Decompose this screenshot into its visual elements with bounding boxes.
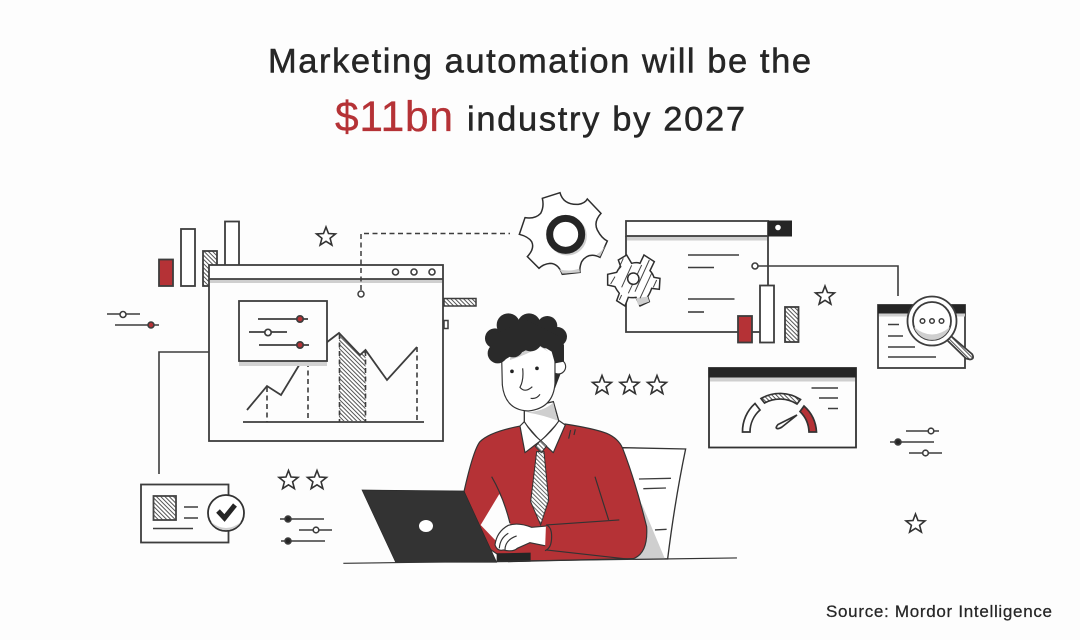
dashed connector to gear [358,234,510,297]
bar chart: top right [738,286,798,342]
hair [485,313,567,363]
icon: small gear [608,255,660,306]
hair back [553,350,564,388]
gauge [742,393,816,432]
panel: search window [878,296,973,368]
sweater [464,424,647,562]
line chart [243,333,424,422]
connector: window to check card [159,352,209,474]
icon: large gear [519,193,607,274]
panel: gauge window [708,368,856,448]
person at laptop [343,313,737,563]
sliders: left [107,312,159,328]
connector to search window [752,263,898,296]
bar chart: top left [159,222,239,286]
collar [520,421,565,453]
hand [495,524,552,551]
title [268,42,811,141]
stars: three in a row [592,376,666,394]
panel: main dashboard window [209,265,443,441]
chair [623,448,686,559]
laptop [362,490,531,562]
panel shadow [239,361,327,366]
stars: two in a row [279,470,326,489]
icon: star [906,514,925,532]
source note: Source: Mordor Intelligence [826,602,1052,621]
window buttons [392,269,435,275]
neck [524,402,559,442]
face [502,340,566,411]
icon: check badge [208,495,244,531]
black window tab [768,220,792,236]
desk line [343,558,737,563]
highlighted figure: $11bn [335,94,453,141]
sliders: bottom left [280,516,332,544]
sliders: right [890,428,942,456]
icon: star [316,227,336,245]
icon: magnifying glass [908,296,973,360]
side tabs of main window [444,298,476,328]
panel: settings window top right [626,220,792,332]
text lines [688,255,739,312]
tie [531,440,549,525]
title second line: industry by 2027 [467,100,745,138]
panel: profile card with check [141,484,244,542]
icon: star [816,286,834,304]
arm gap [481,494,510,542]
settings panel with sliders [239,301,327,361]
title: Marketing automation will be the [268,42,811,80]
